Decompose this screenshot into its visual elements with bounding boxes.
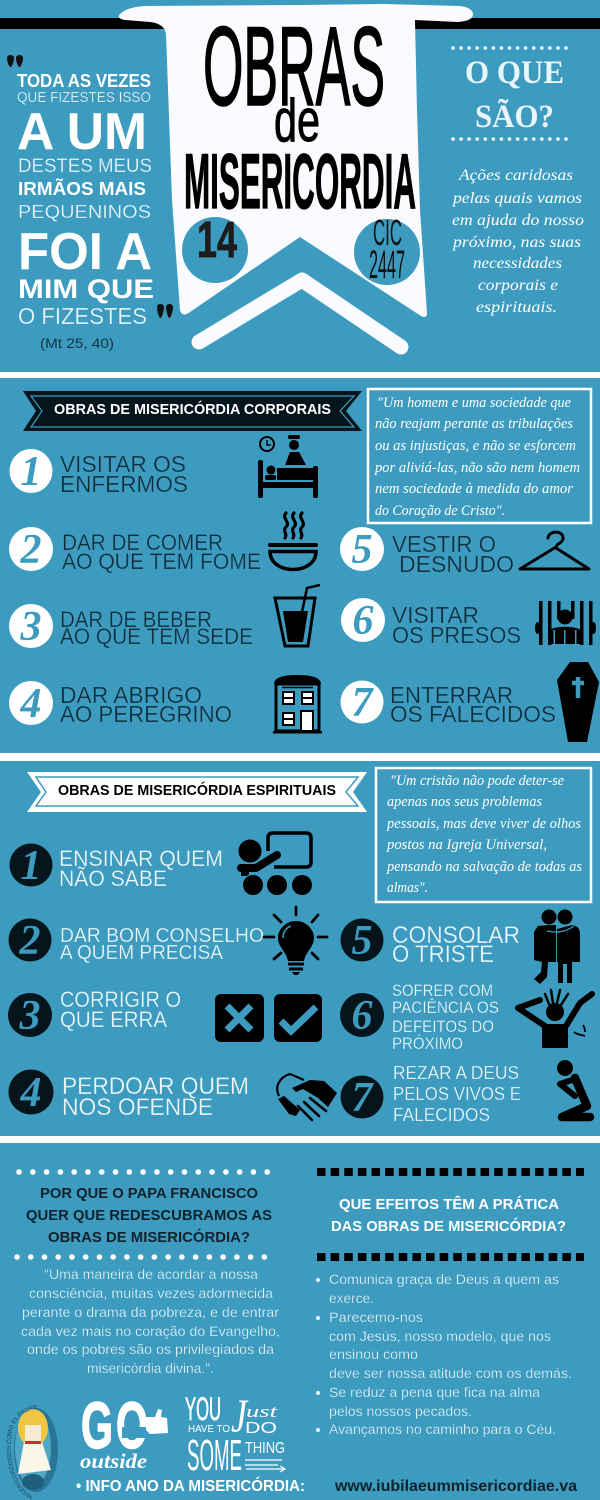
item 5: vestir o desnudo: VESTIR O bbox=[392, 531, 496, 557]
item 6: sofrer com paciência: 6 bbox=[352, 993, 372, 1039]
title: de bbox=[274, 87, 320, 154]
bullet list: efeitos: Avançamos no caminho para o Céu. bbox=[329, 1422, 556, 1437]
bible quote: A UM bbox=[17, 103, 147, 161]
bible quote: IRMÃOS MAIS bbox=[18, 178, 146, 199]
icon: x and check boxes bbox=[215, 994, 322, 1042]
heading: por que bbox=[26, 1185, 272, 1246]
icon: prison bars bbox=[535, 601, 596, 645]
heading: por que: QUER QUE REDESCUBRAMOS AS bbox=[26, 1207, 272, 1224]
item 4: perdoar quem nos ofende: PERDOAR QUEM bbox=[62, 1073, 249, 1100]
icon: handshake bbox=[277, 1074, 337, 1120]
heading: efeitos bbox=[331, 1195, 566, 1235]
bible quote bbox=[7, 55, 173, 351]
item 2: dar bom conselho: 2 bbox=[18, 918, 40, 964]
icon: frustrated person bbox=[518, 990, 592, 1048]
item 7: rezar a deus: REZAR A DEUS bbox=[393, 1062, 519, 1083]
item 6: sofrer com paciência: PACIÊNCIA OS bbox=[392, 998, 499, 1017]
icon: teacher and pupils bbox=[238, 833, 312, 896]
panel: header bbox=[0, 4, 600, 351]
bullet list: efeitos: ensinou como bbox=[329, 1347, 418, 1362]
item 4: perdoar quem nos ofende bbox=[8, 1070, 249, 1121]
item 4: dar abrigo: AO PEREGRINO bbox=[60, 701, 232, 727]
item 5: vestir o desnudo bbox=[340, 527, 514, 577]
bible quote: FOI A bbox=[18, 223, 152, 281]
icon: glass bbox=[275, 585, 320, 646]
logo: ano da misericórdia: MISERICORDIOSOS COMO EL PADRE bbox=[6, 1404, 38, 1500]
badge: 14: 14 bbox=[197, 211, 237, 268]
item 1: visitar os enfermos: VISITAR OS bbox=[60, 451, 186, 477]
quote box: espirituais: almas". bbox=[387, 880, 428, 896]
item 1: ensinar quem não sabe: ENSINAR QUEM bbox=[59, 846, 223, 871]
item 1: ensinar quem não sabe: NÃO SABE bbox=[59, 866, 167, 891]
bible quote: DESTES MEUS bbox=[18, 155, 152, 177]
bullet list: efeitos: deve ser nossa atitude com os demás. bbox=[329, 1366, 572, 1381]
logo: ano da misericórdia bbox=[6, 1404, 58, 1500]
panel: o que são: necessidades bbox=[473, 255, 562, 272]
panel: o que são: próximo, nas suas bbox=[452, 234, 581, 251]
quote box: espirituais: postos na Igreja Universal, bbox=[386, 837, 547, 853]
graphic: go outside: O bbox=[116, 1388, 148, 1462]
item 7: rezar a deus: 7 bbox=[352, 1075, 374, 1121]
item 5: consolar o triste bbox=[340, 918, 520, 968]
item 7: enterrar os falecidos: 7 bbox=[352, 680, 374, 726]
item 6: visitar os presos: OS PRESOS bbox=[392, 622, 521, 648]
icon: bed with nurse bbox=[258, 435, 318, 498]
text: pope quote: cada vez mais no coração do Evangelho, bbox=[21, 1324, 280, 1339]
footer: website: www.iubilaeummisericordiae.va bbox=[334, 1478, 577, 1495]
title bbox=[184, 4, 416, 225]
item 1: visitar os enfermos bbox=[10, 449, 188, 497]
bible quote: (Mt 25, 40) bbox=[40, 335, 114, 351]
item 4: perdoar quem nos ofende: NOS OFENDE bbox=[62, 1094, 213, 1121]
bible quote: PEQUENINOS bbox=[18, 201, 151, 222]
icon: coffin bbox=[557, 662, 599, 742]
graphic: go outside: G bbox=[81, 1388, 113, 1462]
quote box: corporais: do Coração de Cristo". bbox=[375, 503, 505, 519]
quote box: espirituais: pessoais, mas deve viver de olhos bbox=[386, 816, 581, 832]
quote box: corporais: por aliviá-las, não são nem homem bbox=[374, 460, 580, 476]
heading: efeitos: DAS OBRAS DE MISERICÓRDIA? bbox=[331, 1217, 566, 1235]
item 3: dar de beber: 3 bbox=[20, 604, 42, 650]
item 3: corrigir o que erra: QUE ERRA bbox=[60, 1007, 167, 1032]
icon: light bulb bbox=[264, 907, 327, 975]
item 1: visitar os enfermos: ENFERMOS bbox=[60, 471, 188, 497]
item 4: dar abrigo: DAR ABRIGO bbox=[60, 682, 202, 708]
graphic: you just have to do something: THING bbox=[245, 1440, 285, 1457]
graphic: you just have to do something: SOME bbox=[187, 1431, 242, 1480]
item 2: dar de comer bbox=[9, 527, 261, 574]
bible quote: QUE FIZESTES ISSO bbox=[17, 90, 151, 106]
icon: hanger bbox=[520, 532, 589, 569]
item 6: sofrer com paciência bbox=[340, 982, 499, 1053]
quote box: espirituais bbox=[376, 768, 591, 902]
title: OBRAS bbox=[203, 4, 385, 129]
item 5: vestir o desnudo: 5 bbox=[352, 527, 372, 573]
item 4: perdoar quem nos ofende: 4 bbox=[20, 1070, 42, 1116]
bullet list: efeitos: Comunica graça de Deus a quem as bbox=[329, 1272, 559, 1287]
graphic: go outside bbox=[80, 1388, 168, 1473]
footer: info ano da misericórdia: • INFO ANO DA MISERICÓRDIA: bbox=[76, 1476, 305, 1495]
icon: praying person bbox=[557, 1060, 590, 1117]
bullet list: efeitos: Parecemo-nos bbox=[329, 1310, 423, 1325]
item 2: dar de comer: DAR DE COMER bbox=[62, 530, 223, 555]
item 3: dar de beber: AO QUE TEM SEDE bbox=[60, 624, 253, 649]
heading: efeitos: QUE EFEITOS TÊM A PRÁTICA bbox=[339, 1195, 559, 1213]
lower chevron bbox=[199, 280, 401, 347]
item 6: sofrer com paciência: DEFEITOS DO bbox=[392, 1018, 494, 1036]
item 7: rezar a deus: PELOS VIVOS E bbox=[393, 1083, 521, 1104]
item 6: sofrer com paciência: PRÓXIMO bbox=[392, 1034, 463, 1053]
bullet list: efeitos: com Jesús, nosso modelo, que nos bbox=[329, 1329, 551, 1344]
icon: building bbox=[273, 675, 322, 734]
graphic: you just have to do something bbox=[185, 1390, 285, 1480]
heading: por que: POR QUE O PAPA FRANCISCO bbox=[40, 1185, 258, 1202]
item 2: dar de comer: 2 bbox=[20, 527, 42, 573]
item 6: visitar os presos: VISITAR bbox=[392, 602, 479, 628]
item 3: dar de beber: DAR DE BEBER bbox=[60, 607, 212, 632]
panel: obras corporais bbox=[9, 389, 599, 742]
panel: o que são: corporais e bbox=[478, 277, 558, 294]
icon: opening quote bbox=[7, 55, 23, 67]
text: pope quote bbox=[21, 1267, 280, 1376]
quote box: espirituais: pensando na salvação de todas as bbox=[386, 859, 582, 875]
bullet list: efeitos bbox=[316, 1272, 572, 1437]
panel: que efeitos bbox=[316, 1172, 584, 1437]
quote box: corporais: nem sociedade à medida do amor bbox=[375, 481, 573, 497]
badge: 14 bbox=[182, 211, 248, 283]
icon: closing quote bbox=[157, 304, 173, 318]
panel: o que são: em ajuda do nosso bbox=[452, 212, 584, 229]
bible quote: TODA AS VEZES bbox=[17, 71, 151, 91]
item 2: dar bom conselho: DAR BOM CONSELHO bbox=[60, 925, 264, 947]
item 7: enterrar os falecidos bbox=[340, 680, 556, 727]
quote box: espirituais: "Um cristão não pode deter-se bbox=[390, 773, 565, 789]
panel: o que são: espirituais. bbox=[476, 299, 557, 316]
bullet list: efeitos: Se reduz a pena que fica na alma bbox=[329, 1385, 541, 1400]
item 3: corrigir o que erra bbox=[8, 987, 181, 1039]
item 5: vestir o desnudo: DESNUDO bbox=[399, 551, 514, 577]
item 1: ensinar quem não sabe: 1 bbox=[20, 843, 42, 889]
item 7: enterrar os falecidos: OS FALECIDOS bbox=[390, 701, 556, 727]
item 6: sofrer com paciência: SOFRER COM bbox=[392, 982, 493, 1000]
graphic: you just have to do something: J bbox=[231, 1390, 249, 1443]
text: pope quote: misericórdia divina.". bbox=[87, 1361, 214, 1376]
bullet list: efeitos: pelos nossos pecados. bbox=[329, 1404, 472, 1419]
ribbon heading: corporais: OBRAS DE MISERICÓRDIA CORPORAIS bbox=[54, 400, 331, 418]
item 4: dar abrigo bbox=[9, 681, 232, 727]
item 1: visitar os enfermos: 1 bbox=[20, 449, 42, 495]
panel: o que são: pelas quais vamos bbox=[452, 190, 582, 207]
item 1: ensinar quem não sabe bbox=[10, 843, 223, 891]
text: pope quote: onde os pobres são os privilegiados da bbox=[27, 1342, 275, 1357]
item 3: corrigir o que erra: CORRIGIR O bbox=[60, 987, 181, 1012]
bible quote: MIM QUE bbox=[18, 274, 154, 304]
badge: CIC 2447: CIC bbox=[373, 212, 402, 253]
quote box: corporais: "Um homem e uma sociedade que bbox=[377, 395, 572, 411]
badge: CIC 2447: 2447 bbox=[369, 243, 405, 287]
panel: obras espirituais bbox=[8, 768, 592, 1125]
item 5: consolar o triste: O TRISTE bbox=[392, 941, 494, 968]
item 5: consolar o triste: 5 bbox=[352, 918, 372, 964]
panel: por que o papa bbox=[17, 1172, 281, 1376]
item 4: dar abrigo: 4 bbox=[20, 681, 42, 727]
text: pope quote: consciência, muitas vezes adormecida bbox=[29, 1286, 274, 1301]
item 5: consolar o triste: CONSOLAR bbox=[392, 922, 520, 949]
item 2: dar de comer: AO QUE TEM FOME bbox=[62, 549, 261, 574]
bible quote: O FIZESTES bbox=[18, 303, 147, 329]
icon: bowl bbox=[268, 513, 318, 570]
white banner bbox=[119, 4, 473, 317]
badge: CIC 2447 bbox=[354, 212, 420, 287]
text: pope quote: "Uma maneira de acordar a nossa bbox=[44, 1267, 258, 1282]
item 2: dar bom conselho bbox=[8, 918, 264, 964]
panel: o que são: Ações caridosas bbox=[458, 167, 573, 184]
item 6: visitar os presos: 6 bbox=[352, 598, 374, 644]
item 6: visitar os presos bbox=[341, 598, 521, 648]
panel: o que são bbox=[452, 48, 584, 316]
graphic: you just have to do something: DO bbox=[245, 1420, 277, 1437]
panel: o que são: O QUE bbox=[465, 55, 564, 91]
item 3: corrigir o que erra: 3 bbox=[18, 993, 40, 1039]
graphic: you just have to do something: HAVE TO bbox=[188, 1423, 230, 1435]
quote box: corporais: ou as injustiças, e não se esforcem bbox=[375, 438, 576, 454]
bullet list: efeitos: exerce. bbox=[329, 1291, 374, 1306]
item 7: rezar a deus: FALECIDOS bbox=[393, 1104, 490, 1125]
item 7: enterrar os falecidos: ENTERRAR bbox=[390, 682, 513, 708]
text: pope quote: perante o drama da pobreza, e de entrar bbox=[22, 1305, 280, 1320]
graphic: you just have to do something: ust bbox=[246, 1402, 279, 1421]
icon: two people embracing bbox=[534, 910, 580, 984]
quote box: corporais: não reajam perante as tribulações bbox=[375, 416, 573, 432]
item 7: rezar a deus bbox=[340, 1062, 521, 1125]
heading: por que: OBRAS DE MISERICÓRDIA? bbox=[48, 1228, 250, 1246]
top black bar bbox=[0, 18, 600, 29]
ribbon heading: corporais bbox=[23, 391, 362, 431]
item 2: dar bom conselho: A QUEM PRECISA bbox=[60, 942, 224, 964]
item 3: dar de beber bbox=[9, 604, 253, 650]
ribbon heading: espirituais: OBRAS DE MISERICÓRDIA ESPIRITUAIS bbox=[58, 781, 336, 799]
graphic: you just have to do something: YOU bbox=[185, 1391, 221, 1427]
quote box: espirituais: apenas nos seus problemas bbox=[387, 794, 542, 810]
graphic: go outside: outside bbox=[80, 1449, 147, 1473]
ribbon heading: espirituais bbox=[27, 772, 367, 812]
quote box: corporais bbox=[368, 389, 591, 523]
panel: o que são: SÃO? bbox=[475, 98, 554, 135]
